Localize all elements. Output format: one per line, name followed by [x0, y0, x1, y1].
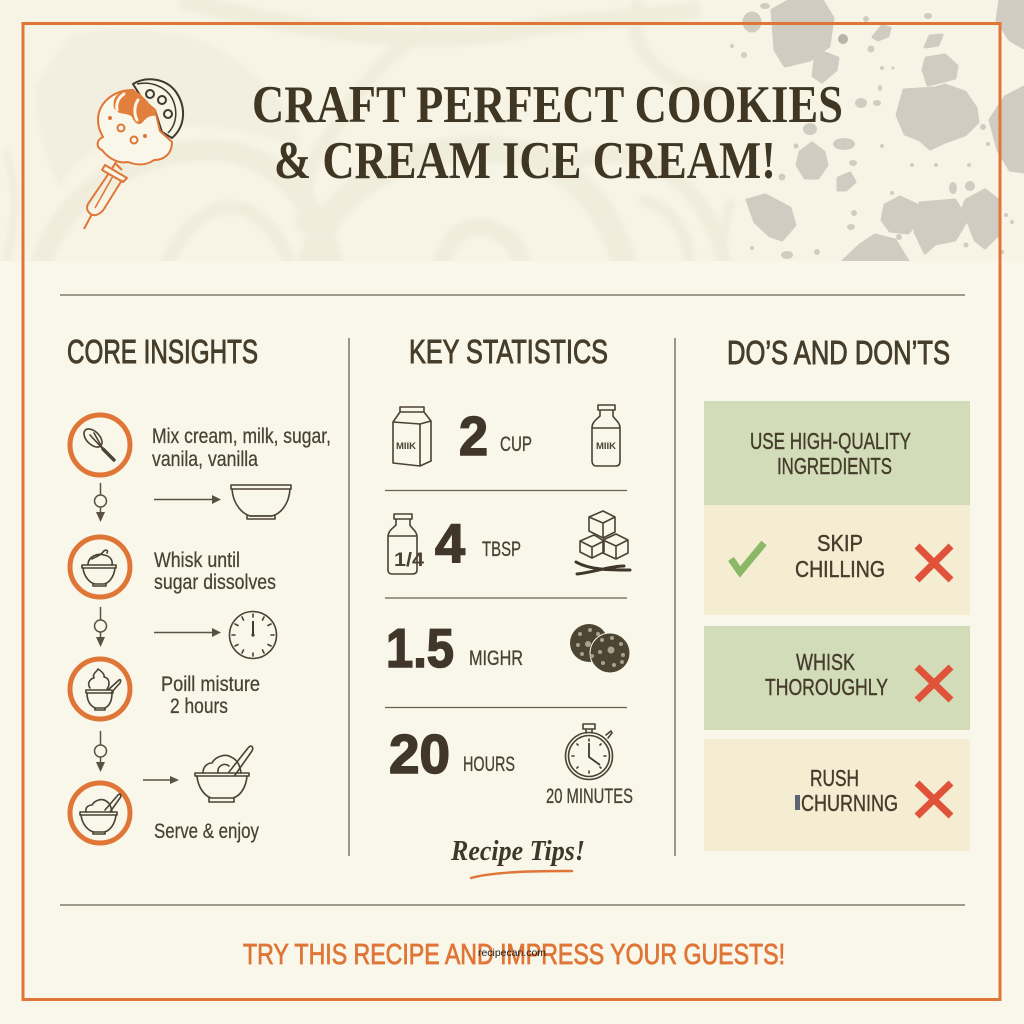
connector arrow 1 — [94, 483, 106, 522]
step 3: ice cream cup icon — [70, 659, 130, 719]
recipe tips note — [450, 836, 585, 878]
step 1 text: Mix cream, milk, sugar, — [152, 425, 331, 448]
stat: 2 cup — [459, 405, 532, 467]
recipe tips note: Recipe Tips! — [450, 836, 585, 867]
icon: milk bottle: MIIK — [596, 441, 616, 452]
icon: stopwatch — [566, 724, 612, 780]
row: skip chilling: SKIP — [817, 530, 863, 556]
stat: 20 hours — [389, 723, 515, 785]
step 1 text — [152, 425, 331, 471]
stat: 4 tbsp: TBSP — [482, 538, 521, 561]
footer call to action: TRY THIS RECIPE AND IMPRESS YOUR GUESTS! — [243, 939, 785, 971]
heading: core insights: CORE INSIGHTS — [67, 333, 258, 370]
header marble background — [0, 0, 1024, 270]
arrow to bowl — [154, 495, 221, 504]
heading: key statistics: KEY STATISTICS — [409, 333, 608, 370]
step 4: bowl icon — [70, 783, 130, 843]
row: rush churning: CHURNING — [801, 790, 898, 816]
icon: ice cream scoop with cookie — [84, 79, 183, 229]
icon: milk carton — [393, 407, 431, 466]
row: skip chilling — [704, 505, 970, 615]
step 3 text: 2 hours — [170, 695, 228, 718]
stat: 1.5 mighr: 1.5 — [386, 617, 454, 679]
icon: clock — [230, 612, 276, 658]
row: use high-quality ingredients: INGREDIENTS — [777, 453, 892, 479]
stat: 20 hours: HOURS — [463, 753, 515, 776]
stat: 4 tbsp: 4 — [435, 512, 465, 574]
panel: key statistics — [385, 333, 633, 878]
step 2 text: Whisk until — [154, 549, 240, 572]
stat: 2 cup: CUP — [500, 433, 532, 456]
arrow to clock — [154, 628, 221, 637]
stat: 2 cup: 2 — [459, 405, 488, 467]
step 3 text: Poill misture — [161, 673, 260, 696]
label: 20 minutes: 20 MINUTES — [546, 785, 633, 808]
stat: 1.5 mighr: MIGHR — [469, 647, 523, 670]
arrow to serving bowl — [143, 776, 179, 784]
step 3 text — [161, 673, 260, 718]
heading: do's and don'ts: DO’S AND DON’TS — [727, 334, 950, 371]
row: whisk thoroughly — [704, 626, 970, 730]
icon: mixing bowl — [231, 485, 291, 519]
title: & CREAM ICE CREAM! — [274, 132, 776, 190]
icon: quarter milk bottle: 1/4 — [394, 550, 424, 571]
panel: core insights — [67, 333, 331, 843]
icon: cookies — [570, 624, 630, 673]
row: use high-quality ingredients — [704, 401, 970, 505]
stat: 4 tbsp — [435, 512, 521, 574]
watermark: recipecan.com — [478, 947, 546, 959]
step 2 text: sugar dissolves — [154, 571, 276, 594]
step 4 text: Serve & enjoy — [154, 820, 259, 843]
step 1: whisk icon — [70, 415, 130, 475]
connector arrow 3 — [94, 731, 106, 772]
icon: sugar cubes and vanilla — [576, 511, 630, 574]
step 2 text — [154, 549, 276, 594]
connector arrow 2 — [94, 607, 106, 647]
icon: milk bottle — [592, 405, 620, 466]
row: whisk thoroughly: WHISK — [796, 649, 856, 675]
panel: do's and don'ts — [704, 334, 970, 851]
row: rush churning — [704, 739, 970, 851]
step 1 text: vanila, vanilla — [152, 448, 258, 471]
icon: milk carton: MIIK — [396, 441, 416, 452]
icon: serving bowl with spoon — [195, 746, 253, 802]
title: CRAFT PERFECT COOKIES — [252, 76, 843, 134]
row: rush churning: RUSH — [810, 765, 859, 791]
step 2: bowl icon — [70, 537, 130, 597]
icon: quarter milk bottle — [388, 514, 424, 574]
row: skip chilling: CHILLING — [795, 556, 885, 582]
stat: 1.5 mighr — [386, 617, 523, 679]
row: whisk thoroughly: THOROUGHLY — [765, 674, 888, 700]
title — [252, 76, 843, 190]
row: use high-quality ingredients: USE HIGH-QUALITY — [750, 428, 911, 454]
stat: 20 hours: 20 — [389, 723, 450, 785]
